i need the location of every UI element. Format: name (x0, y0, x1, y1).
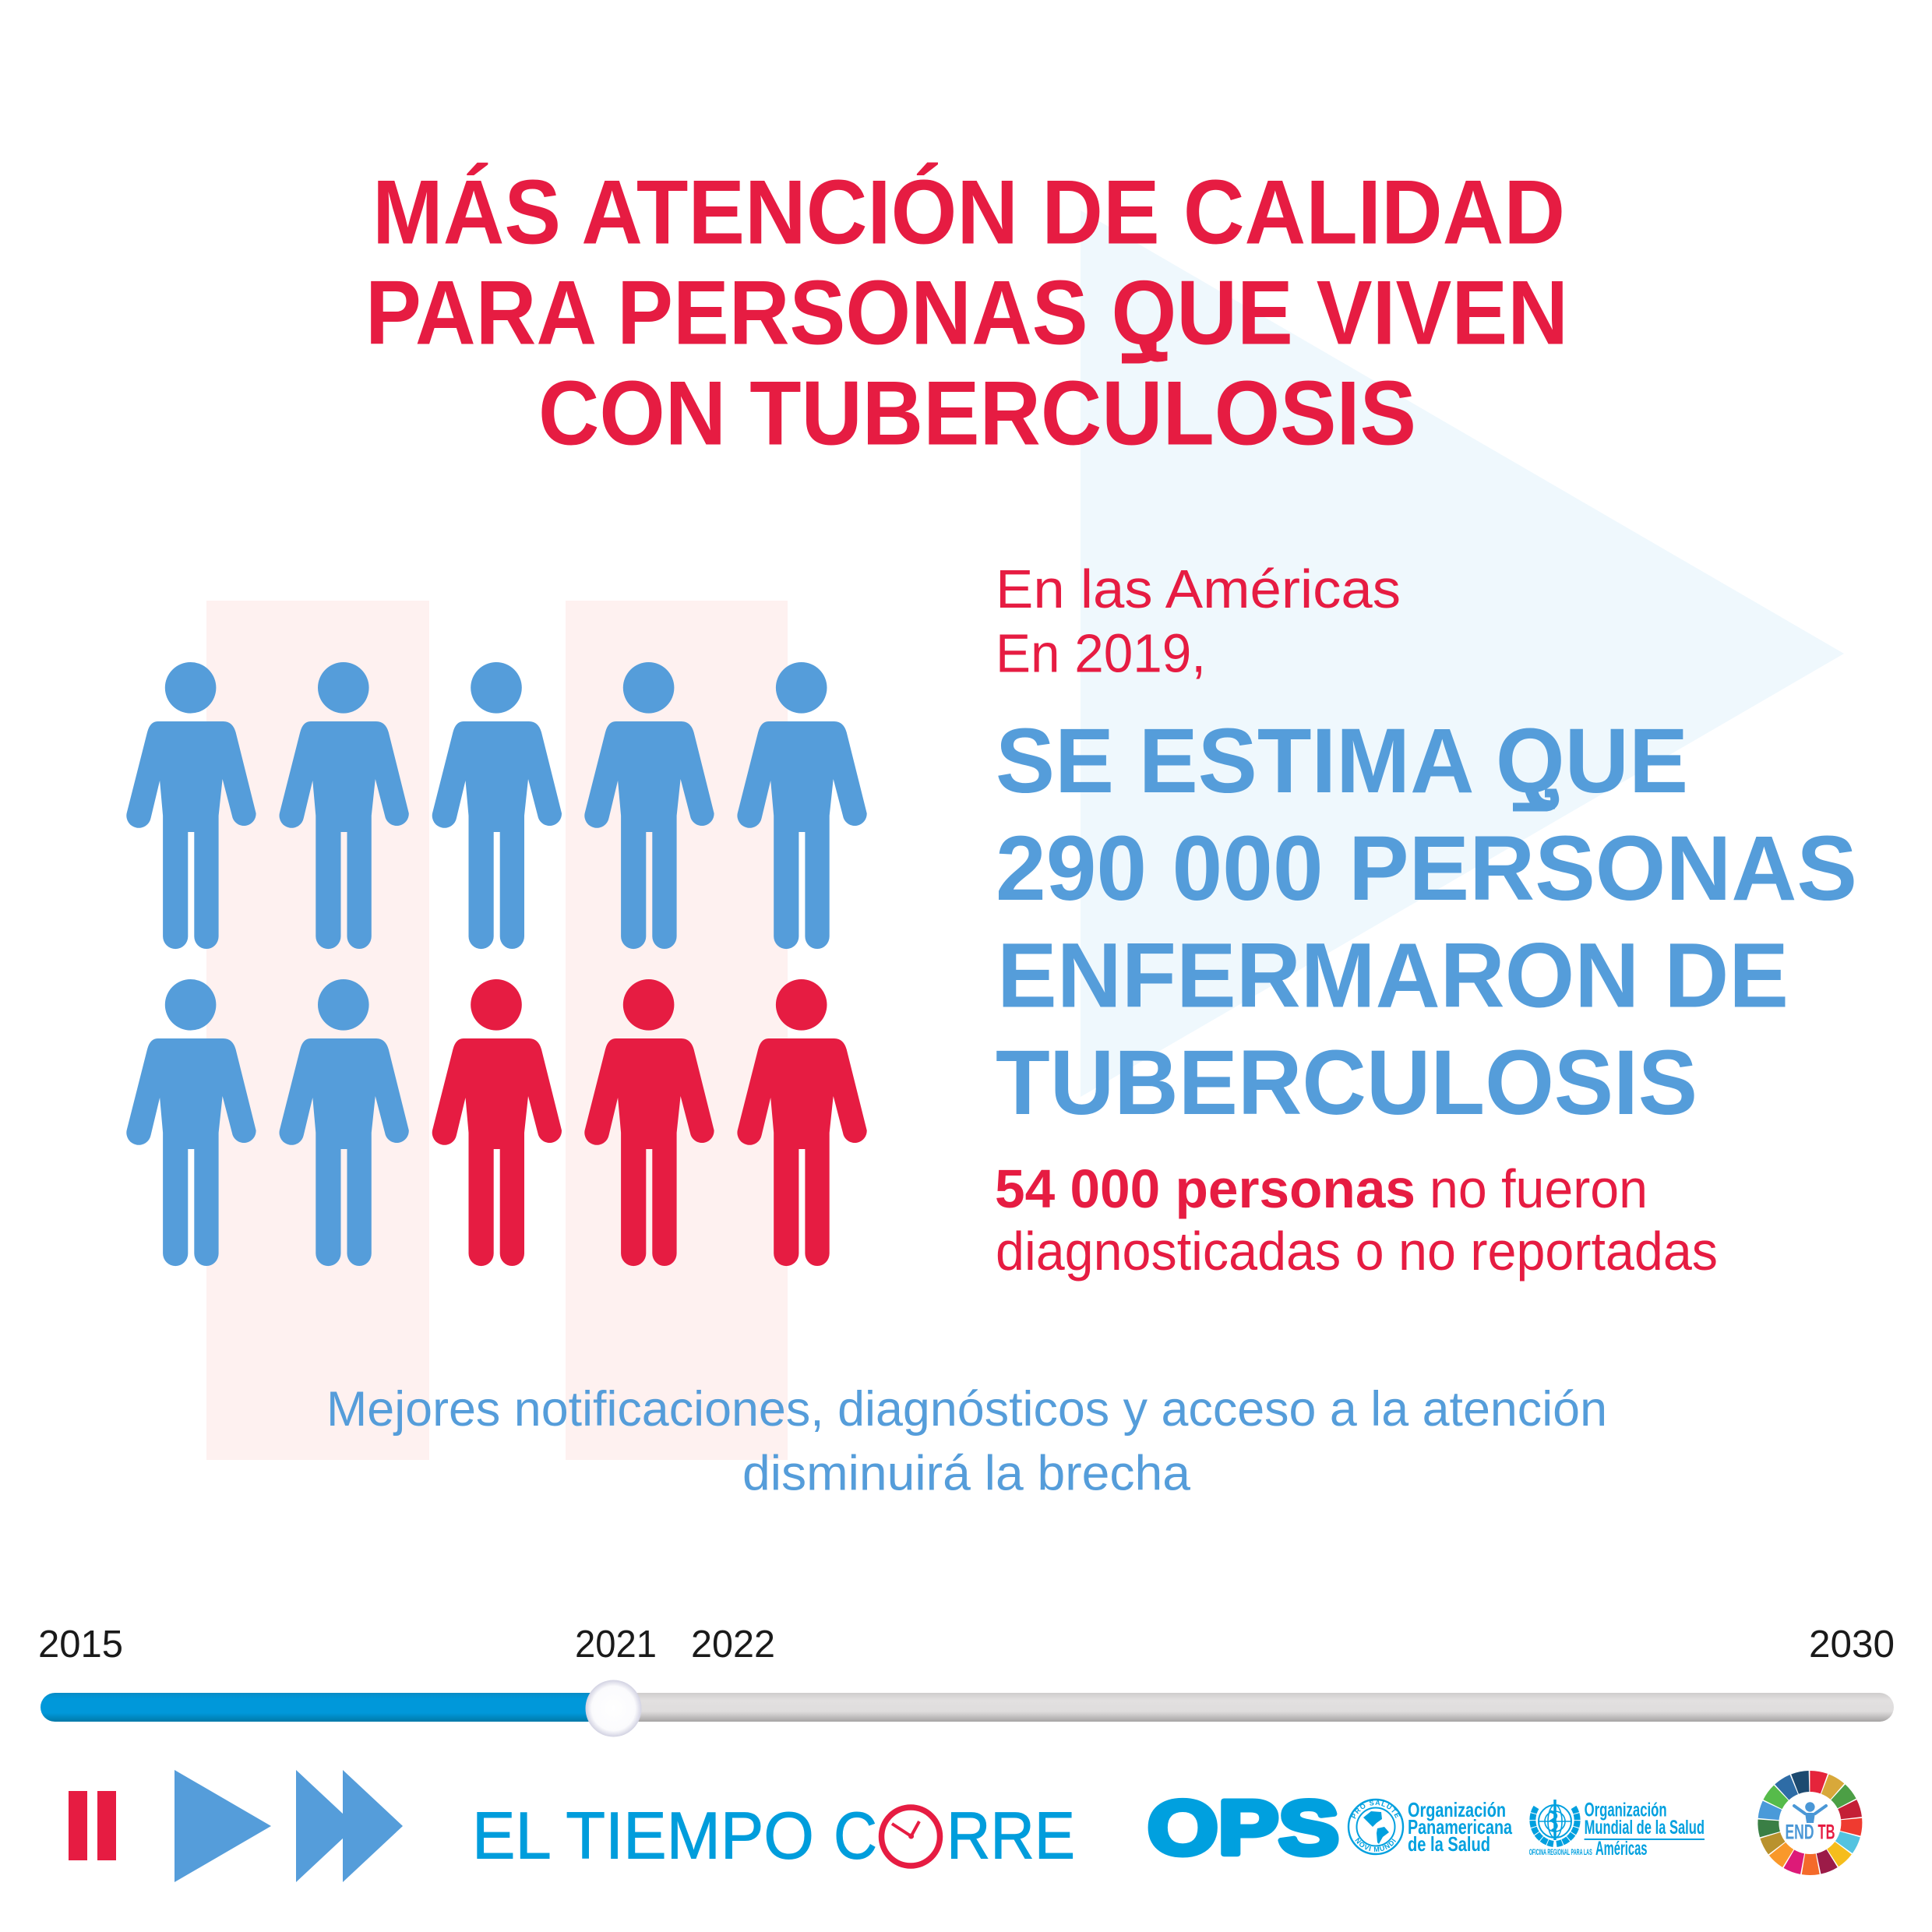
intro text (996, 559, 1401, 684)
icon: fast forward (296, 1770, 403, 1882)
campaign wordmark: el tiempo corre (472, 1800, 1075, 1873)
track remaining (545, 1693, 1894, 1722)
icon: person with raised arms (1794, 1802, 1826, 1823)
title line 3: CON TUBERCULOSIS (538, 361, 1416, 464)
pink vertical band left (206, 601, 429, 1460)
logo: End TB wheel: TB (1818, 1820, 1835, 1843)
logo: End TB wheel (1751, 1764, 1869, 1882)
person row 2 col 3 red (432, 979, 562, 1266)
headline statistic (996, 710, 1857, 1134)
logo text: Organización Mundial de la Salud (1529, 1800, 1705, 1860)
campaign wordmark: el tiempo corre: RRE (947, 1800, 1075, 1873)
closing line 2: disminuirá la brecha (742, 1447, 1191, 1501)
year 2015: 2015 (38, 1624, 123, 1666)
timeline (38, 1624, 1895, 1737)
icon: play (175, 1770, 271, 1882)
closing line 1: Mejores notificaciones, diagnósticos y acceso a la atención (326, 1382, 1607, 1437)
intro line 1: En las Américas (996, 559, 1401, 619)
logo text: Organización Mundial de la Salud: Mundial de la Salud (1585, 1817, 1705, 1839)
person row 1 col 2 (280, 662, 409, 949)
note bold part: 54 000 personas (995, 1158, 1416, 1219)
closing message (326, 1382, 1607, 1501)
logo text: Organización Mundial de la Salud: Organización (1585, 1800, 1667, 1821)
logo: PAHO emblem: PRO SALUTE (1351, 1800, 1400, 1819)
logo text: Organización Panamericana de la Salud (1408, 1798, 1512, 1856)
icon: pause (69, 1791, 116, 1860)
year 2030: 2030 (1809, 1624, 1895, 1666)
title line 2: PARA PERSONAS QUE VIVEN (365, 262, 1568, 363)
person row 1 col 3 (432, 662, 562, 949)
logo text: Organización Panamericana de la Salud: Organización (1408, 1798, 1506, 1821)
background play triangle (1081, 210, 1844, 1097)
End TB wordmark: END (1786, 1820, 1814, 1843)
logo: PAHO emblem: NOVI MUNDI (1355, 1837, 1396, 1853)
logo text: Organización Mundial de la Salud: OFICINA REGIONAL PARA LAS (1529, 1848, 1592, 1857)
person row 1 col 5 (737, 662, 867, 949)
logo: WHO emblem (1532, 1800, 1578, 1844)
pink vertical band right (566, 601, 788, 1460)
logo: OPS: OPS (1148, 1785, 1339, 1870)
person row 1 col 1 (126, 662, 256, 949)
headline line 3: ENFERMARON DE (997, 924, 1789, 1027)
person row 2 col 5 red (737, 979, 867, 1266)
logo text: Organización Panamericana de la Salud: de la Salud (1408, 1832, 1490, 1856)
person row 1 col 4 (584, 662, 714, 949)
headline line 4: TUBERCULOSIS (996, 1031, 1698, 1134)
headline line 2: 290 000 PERSONAS (996, 817, 1857, 920)
undiagnosed note (995, 1158, 1718, 1282)
person row 2 col 1 (126, 979, 256, 1266)
person row 2 col 2 (280, 979, 409, 1266)
note line 2: diagnosticadas o no reportadas (996, 1221, 1718, 1282)
campaign wordmark: el tiempo corre: C (834, 1800, 877, 1873)
logo text: Organización Panamericana de la Salud: Panamericana (1408, 1815, 1512, 1839)
headline line 1: SE ESTIMA QUE (996, 710, 1688, 813)
slider knob (586, 1680, 642, 1737)
person row 2 col 4 red (584, 979, 714, 1266)
title (365, 160, 1568, 464)
icon: clock (882, 1807, 940, 1866)
people pictogram: 10 figures, 3 red (126, 662, 867, 1266)
logo: PAHO emblem (1348, 1798, 1404, 1856)
track progress (41, 1693, 617, 1722)
note line 1 end: no fueron (1430, 1158, 1648, 1219)
logo text: Organización Mundial de la Salud: Américas (1595, 1838, 1647, 1860)
year 2022: 2022 (691, 1624, 775, 1666)
intro line 2: En 2019, (996, 623, 1206, 684)
campaign wordmark: el tiempo corre: EL TIEMPO (472, 1800, 814, 1873)
year 2021: 2021 (575, 1624, 657, 1666)
title line 1: MÁS ATENCIÓN DE CALIDAD (372, 160, 1565, 263)
